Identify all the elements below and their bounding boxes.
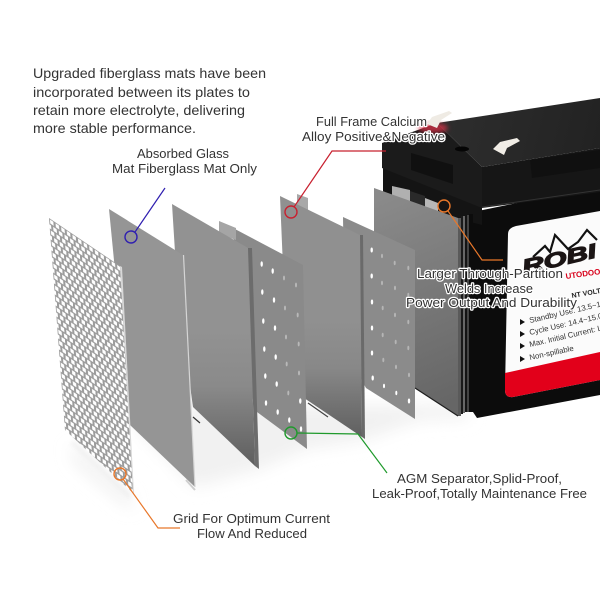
lid side front (382, 123, 482, 208)
callout: green (285, 427, 387, 473)
list bullets (520, 319, 525, 362)
label: AGM separator (372, 472, 587, 501)
label: grid (173, 512, 331, 541)
plate 5 perforated (343, 217, 415, 419)
terminal left (427, 111, 452, 128)
label: AGM separator: Leak-Proof,Totally Maintenance Free (372, 487, 587, 501)
label: absorbed glass: Absorbed Glass (137, 147, 229, 161)
label: through-partition welds: Power Output And Durability (406, 295, 578, 310)
lid recess (411, 153, 453, 184)
label: through-partition welds: Larger Through-Partition (417, 266, 563, 281)
battery case (382, 98, 600, 418)
label: full frame calcium: Full Frame Calcium (316, 115, 427, 129)
intro text (33, 65, 266, 136)
gap under lid (383, 160, 482, 225)
label: through-partition welds (406, 266, 578, 310)
label sheet (505, 211, 600, 397)
spec list (528, 296, 600, 362)
label: absorbed glass (112, 147, 258, 176)
callout: red (285, 151, 386, 218)
label: through-partition welds: Welds Increase (445, 281, 533, 296)
plate 4 solid (280, 194, 365, 439)
plate 1 absorbed glass mat (109, 209, 195, 490)
logo wordmark: ROBI (520, 240, 599, 279)
label: full frame calcium (302, 115, 445, 144)
ribs (458, 214, 473, 416)
foot connector (193, 417, 200, 423)
back plate stack (374, 188, 473, 416)
callout: orange grid (114, 468, 180, 528)
battery label (505, 211, 600, 397)
label: absorbed glass: Mat Fiberglass Mat Only (112, 162, 258, 176)
spec list: Non-spillable (529, 344, 575, 362)
label: grid: Flow And Reduced (197, 527, 307, 541)
label: AGM separator: AGM Separator,Splid-Proof, (397, 472, 562, 486)
plate tab (219, 221, 236, 240)
callout: orange welds (438, 200, 503, 260)
callout: blue (125, 188, 165, 243)
red band (505, 352, 600, 397)
intro text: Upgraded fiberglass mats have been (33, 65, 266, 81)
intro text: retain more electrolyte, delivering (33, 102, 245, 118)
label: full frame calcium: Alloy Positive&Negative (302, 130, 445, 144)
intro text: more stable performance. (33, 120, 196, 136)
logo mountains (533, 230, 597, 257)
metal grid mesh (49, 218, 134, 494)
vent hole (455, 146, 469, 152)
plate tab (297, 194, 308, 210)
plate 3 perforated (233, 228, 307, 449)
lid front face (482, 148, 600, 208)
plate 2 solid (172, 204, 259, 469)
foot connector (308, 403, 328, 417)
battery body (473, 186, 600, 418)
intro text: incorporated between its plates to (33, 84, 250, 100)
terminal right (493, 138, 520, 155)
inner plate tops (392, 186, 438, 214)
floor shadows (70, 405, 470, 510)
lid top face (437, 98, 600, 167)
label: grid: Grid For Optimum Current (173, 512, 331, 526)
red glow near terminal (418, 123, 448, 133)
